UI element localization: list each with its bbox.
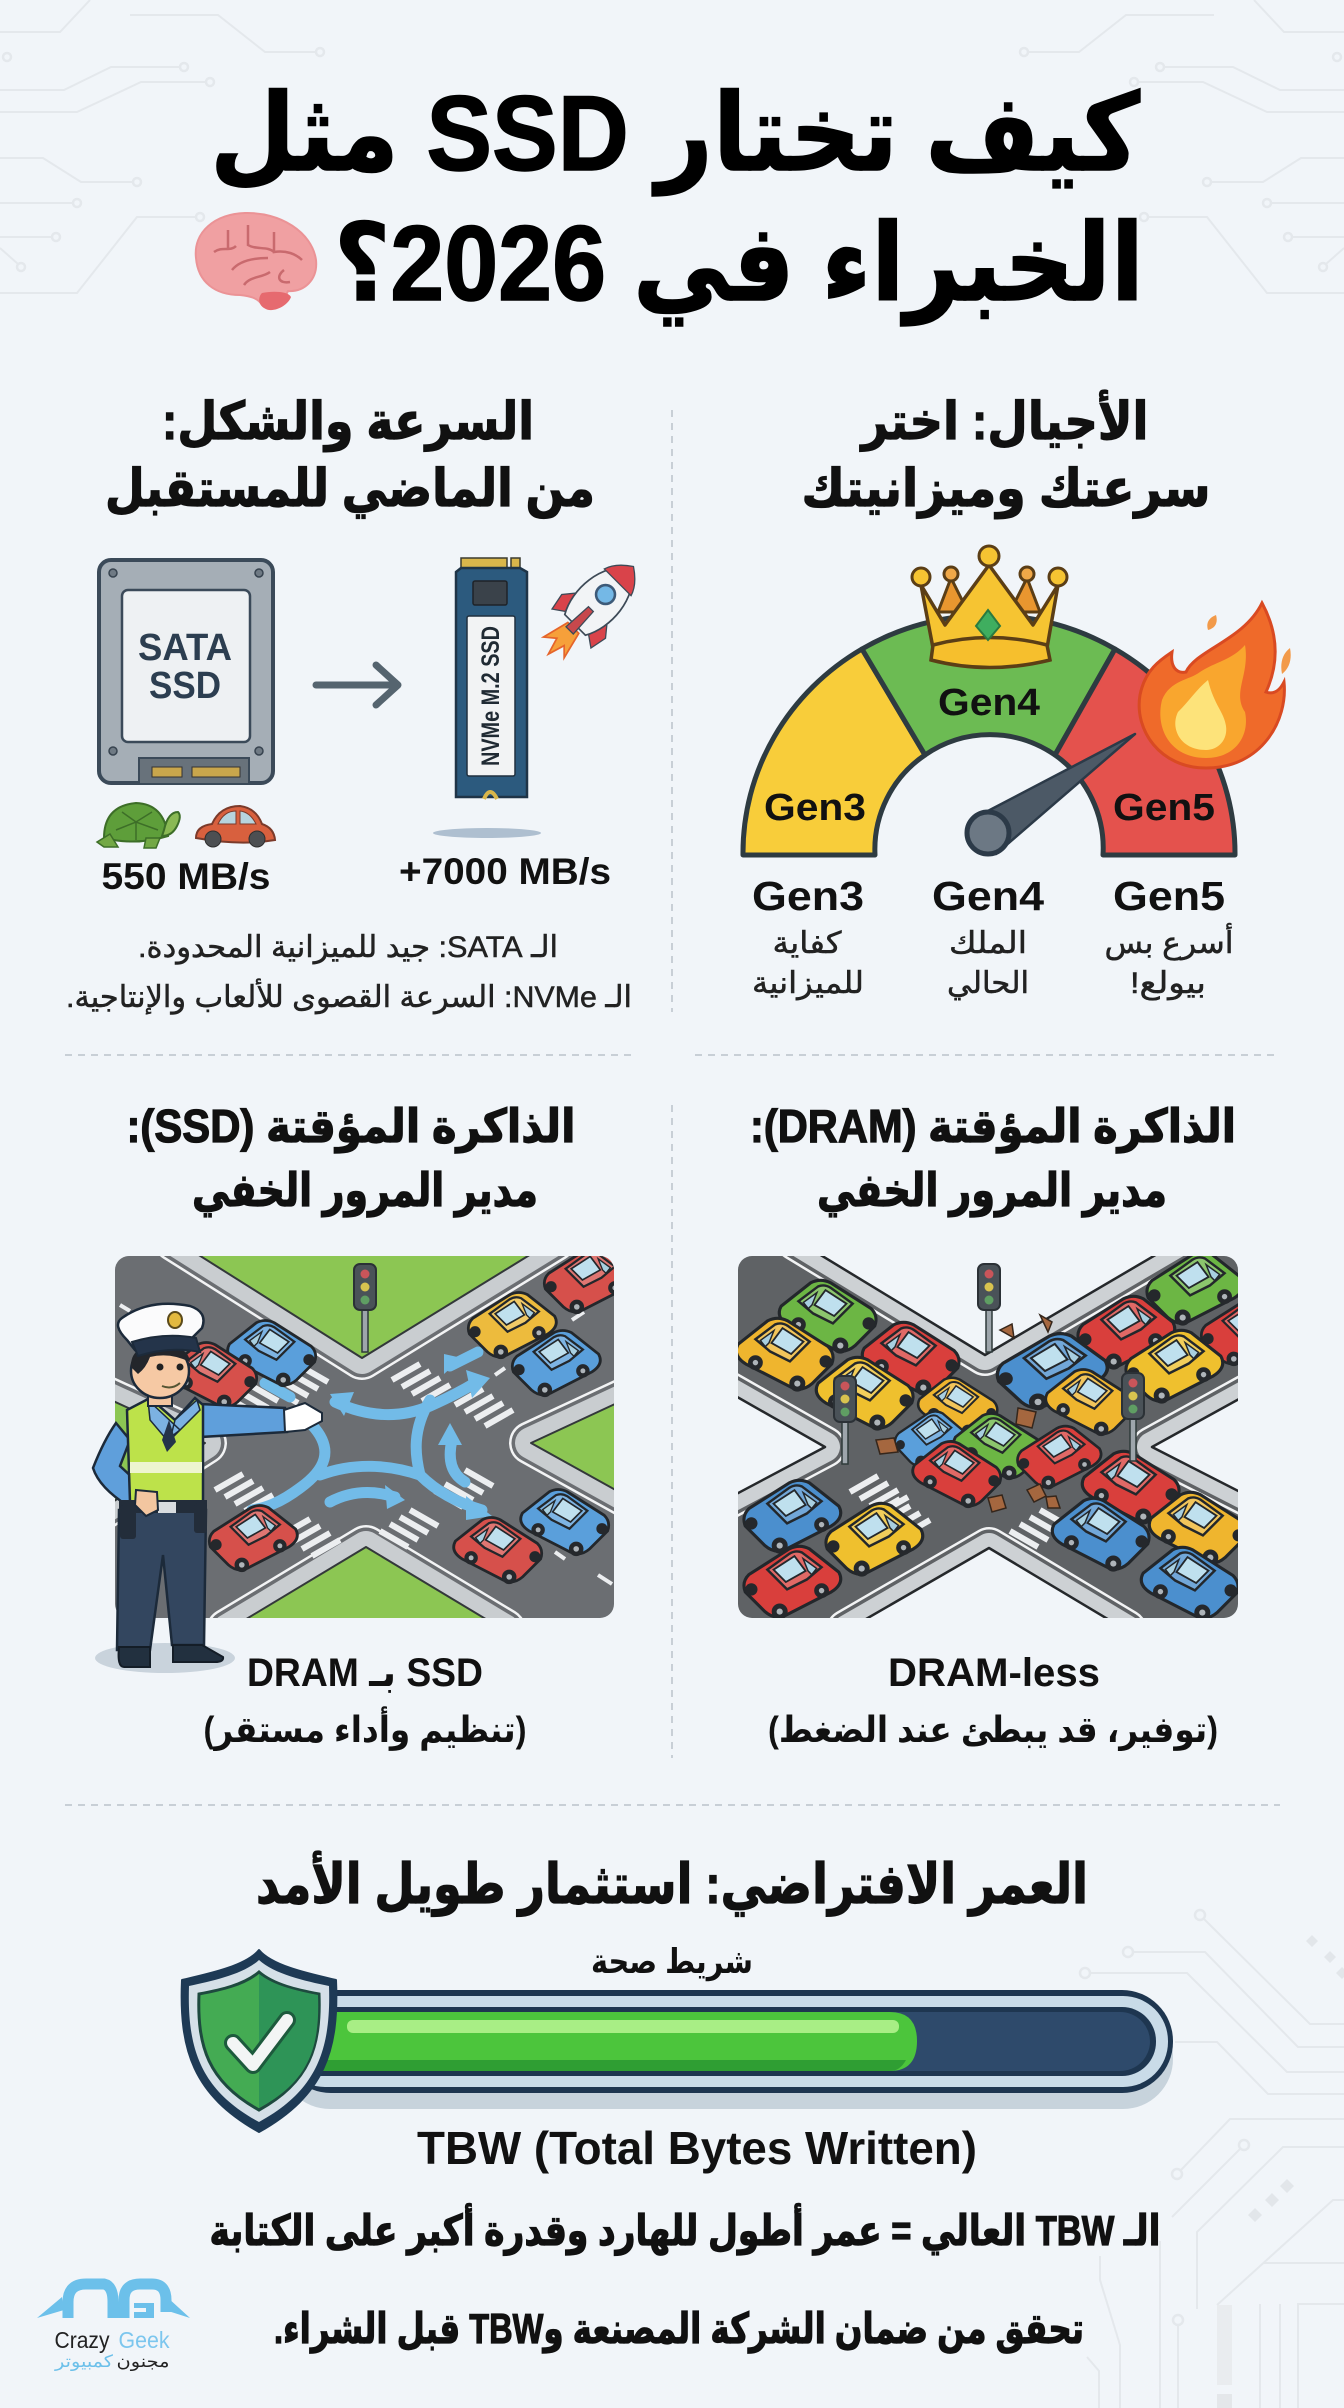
gauge chart: Gen5 bbox=[1113, 787, 1215, 829]
text: TBW explanation: الـ TBW العالي = عمر أطول للهارد وقدرة أكبر على الكتابة bbox=[210, 2203, 1161, 2256]
gauge chart bbox=[743, 615, 1235, 855]
gauge segment Gen4 bbox=[862, 615, 1115, 755]
speed label NVMe: +7000 MB/s bbox=[399, 851, 611, 892]
heading: DRAM cache: مدير المرور الخفي bbox=[817, 1164, 1167, 1217]
icon: flame bbox=[1139, 603, 1291, 768]
speed label SATA: 550 MB/s bbox=[102, 856, 270, 897]
road curbs bbox=[738, 1256, 1238, 1618]
arrow bbox=[316, 665, 398, 705]
label Gen3: كفاية bbox=[772, 927, 842, 960]
caption: SSD with DRAM bbox=[204, 1651, 526, 1751]
label Gen4 bbox=[932, 873, 1044, 1001]
heading: SSD cache: الذاكرة المؤقتة (SSD): bbox=[127, 1100, 576, 1153]
panel: DRAM-less traffic jam bbox=[738, 1106, 1238, 1751]
panel: speed and form factor bbox=[66, 393, 655, 1015]
heading: SSD cache: مدير المرور الخفي bbox=[192, 1164, 538, 1217]
label Gen3: Gen3 bbox=[752, 873, 864, 919]
needle bbox=[967, 734, 1135, 854]
icon: shield with check bbox=[182, 1950, 336, 2132]
icon: brain bbox=[196, 213, 316, 310]
label Gen4: الملك bbox=[949, 927, 1027, 960]
icon: rocket bbox=[525, 545, 655, 675]
lane dashes bbox=[120, 1305, 612, 1584]
icon: SATA SSD drive: SATA bbox=[138, 627, 232, 669]
drive shadow bbox=[433, 828, 541, 838]
cars bbox=[169, 1248, 632, 1584]
title: كيف تختار SSD مثل bbox=[210, 73, 1141, 196]
caption: DRAM-less: (توفير، قد يبطئ عند الضغط) bbox=[768, 1709, 1218, 1751]
label Gen3 bbox=[752, 873, 864, 1000]
caption: DRAM-less: DRAM-less bbox=[888, 1651, 1100, 1695]
text: warranty tip: تحقق من ضمان الشركة المصنعة وTBW قبل الشراء. bbox=[274, 2305, 1084, 2354]
icon: NVMe M.2 SSD bbox=[456, 558, 527, 799]
label Gen5 bbox=[1104, 873, 1234, 1001]
icon: turtle bbox=[97, 803, 180, 848]
road curbs and green areas bbox=[115, 1256, 614, 1618]
decorative circuit bottom right bbox=[1080, 1910, 1344, 2408]
notes: الـ SATA: جيد للميزانية المحدودة. bbox=[138, 931, 558, 965]
crosswalks bbox=[392, 1364, 450, 1401]
heading: generations bbox=[802, 389, 1210, 519]
label Gen5: بيولع! bbox=[1130, 967, 1206, 1001]
health bar bbox=[280, 1990, 1173, 2109]
caption: SSD with DRAM: SSD بـ DRAM bbox=[247, 1651, 483, 1695]
caption: DRAM-less bbox=[768, 1651, 1218, 1751]
illustration: chaotic intersection bbox=[738, 1256, 1238, 1618]
panel: generations bbox=[743, 389, 1291, 1001]
traffic lights bbox=[978, 1264, 1000, 1352]
title bbox=[210, 73, 1144, 326]
notes bbox=[66, 931, 632, 1015]
logo: Crazy Geek: مجنون bbox=[116, 2352, 170, 2371]
traffic flow arrows bbox=[252, 1352, 482, 1510]
label Gen5: أسرع بس bbox=[1104, 922, 1234, 960]
gauge segment Gen5 bbox=[1055, 649, 1235, 855]
title: الخبراء في 2026؟ bbox=[334, 203, 1144, 326]
side traffic lights bbox=[834, 1376, 856, 1464]
gauge chart: Gen3 bbox=[764, 787, 866, 829]
icon: crown bbox=[912, 546, 1067, 668]
label Gen3: للميزانية bbox=[752, 967, 864, 1000]
decorative circuit top left bbox=[0, 0, 324, 293]
illustration: orderly intersection bbox=[115, 1256, 614, 1618]
illustration: traffic officer bbox=[93, 1304, 322, 1673]
icon: NVMe M.2 SSD: NVMe M.2 SSD bbox=[477, 626, 505, 766]
icon: SATA SSD drive: SSD bbox=[149, 665, 221, 707]
icon: SATA SSD drive bbox=[99, 560, 273, 783]
heading: speed and form bbox=[105, 393, 595, 519]
cars bbox=[738, 1256, 1238, 1618]
panel: lifespan bbox=[182, 1851, 1173, 2354]
label Gen4: Gen4 bbox=[932, 873, 1044, 919]
heading: lifespan: العمر الافتراضي: استثمار طويل الأمد bbox=[256, 1851, 1088, 1917]
logo: Crazy Geek: كمبيوتر bbox=[54, 2352, 114, 2371]
heading: DRAM cache bbox=[750, 1100, 1236, 1217]
decorative circuit top right bbox=[1020, 0, 1344, 293]
logo: Crazy Geek bbox=[37, 2284, 190, 2371]
heading: speed and form: من الماضي للمستقبل bbox=[105, 460, 595, 519]
heading: DRAM cache: الذاكرة المؤقتة (DRAM): bbox=[750, 1100, 1236, 1153]
heading: generations: الأجيال: اختر bbox=[859, 389, 1148, 452]
label Gen4: الحالي bbox=[947, 967, 1029, 1001]
heading: SSD cache bbox=[127, 1100, 576, 1217]
crosswalks bbox=[850, 1476, 908, 1513]
health bar label: شريط صحة bbox=[591, 1943, 753, 1982]
heading: speed and form: السرعة والشكل: bbox=[162, 393, 534, 452]
notes: الـ NVMe: السرعة القصوى للألعاب والإنتاجية. bbox=[66, 977, 632, 1015]
dividers bbox=[65, 410, 1280, 1805]
traffic light bbox=[354, 1264, 376, 1352]
caption: SSD with DRAM: (تنظيم وأداء مستقر) bbox=[204, 1706, 526, 1751]
TBW label: TBW (Total Bytes Written) bbox=[417, 2122, 977, 2174]
label Gen5: Gen5 bbox=[1113, 873, 1225, 919]
heading: generations: سرعتك وميزانيتك bbox=[802, 460, 1210, 519]
logo: Crazy Geek: Crazy bbox=[54, 2327, 110, 2353]
gauge chart: Gen4 bbox=[938, 682, 1040, 724]
logo: Crazy Geek: Geek bbox=[118, 2327, 170, 2353]
icon: small car bbox=[196, 806, 275, 847]
panel: SSD cache traffic with officer bbox=[93, 1100, 632, 1751]
crash debris bbox=[876, 1315, 1060, 1512]
gauge segment Gen3 bbox=[743, 649, 925, 855]
